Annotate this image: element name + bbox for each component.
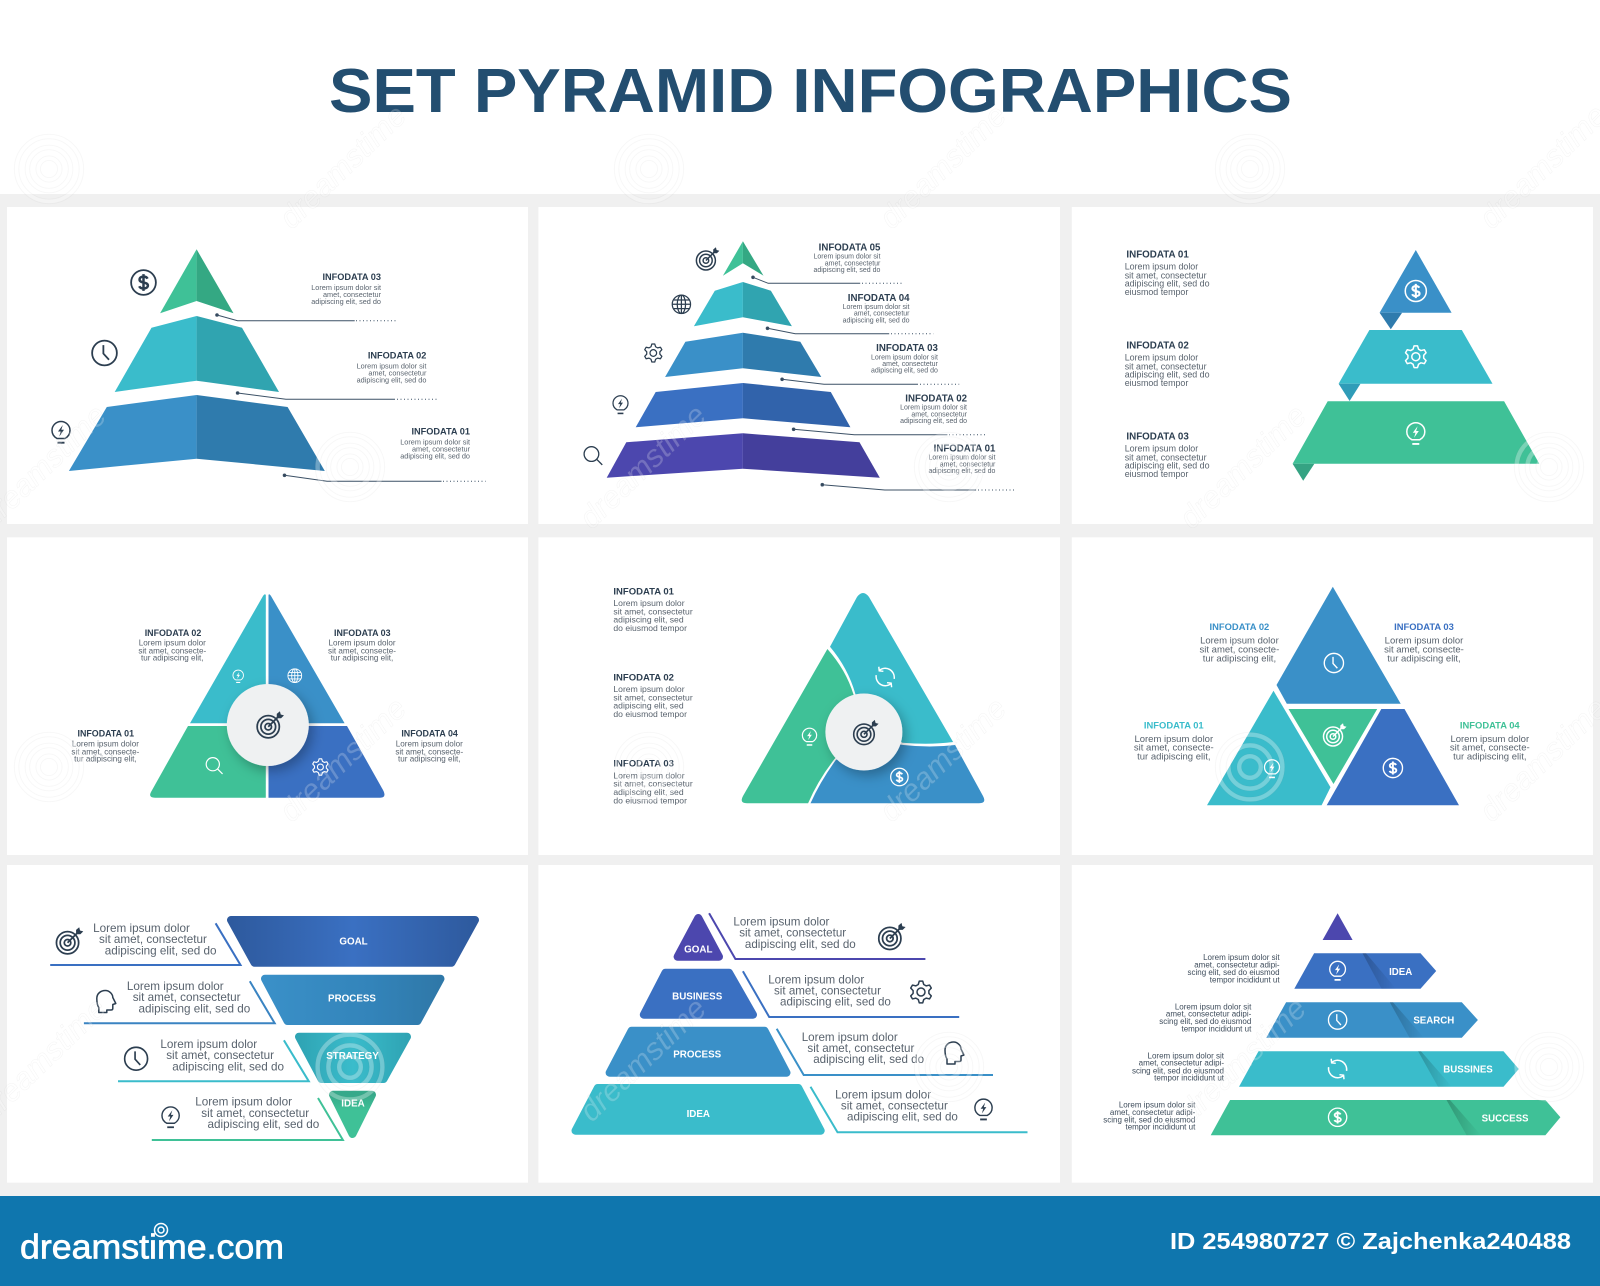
text: infodata 02: tur adipiscing elit, [1203, 653, 1276, 664]
text: infodata 03: Lorem ipsum dolor sit [311, 283, 381, 292]
text: infodata 03: eiusmod tempor [1125, 469, 1188, 479]
text block 4: Lorem ipsum dolor sit [1119, 1101, 1196, 1110]
text: infodata 05: adipiscing elit, sed do [813, 267, 881, 274]
band goal: GOAL [339, 936, 368, 947]
bracket 2 [743, 971, 959, 1017]
text: infodata 03: sit amet, consecte- [328, 646, 396, 655]
watermark overlay: dreamstime [572, 991, 713, 1128]
band process [265, 979, 440, 1021]
text: infodata 01: Lorem ipsum dolor [72, 740, 139, 749]
text: infodata 03: tur adipiscing elit, [1387, 653, 1461, 664]
text block 2: scing elit, sed do eiusmod [1159, 1017, 1251, 1026]
text: infodata 01: Lorem ipsum dolor [1125, 262, 1198, 272]
text: infodata 03: Lorem ipsum dolor sit [871, 354, 938, 361]
icon: target [879, 923, 906, 950]
band strategy: STRATEGY [326, 1051, 379, 1062]
text: infodata 02: INFODATA 02 [1126, 340, 1189, 351]
icon: bulb [613, 396, 628, 413]
text block 3: Lorem ipsum dolor [160, 1038, 257, 1051]
text: infodata 01: amet, consectetur [412, 445, 471, 454]
text: infodata 03: amet, consectetur [882, 361, 939, 368]
text: infodata 04 [1450, 719, 1530, 763]
text block 4: scing elit, sed do eiusmod [1103, 1115, 1195, 1124]
footer bar [0, 1196, 1600, 1286]
text: infodata 01: do eiusmod tempor [613, 623, 687, 633]
text block 1: adipiscing elit, sed do [105, 944, 217, 957]
text: infodata 01: Lorem ipsum dolor sit [400, 438, 470, 447]
text block 1: scing elit, sed do eiusmod [1188, 968, 1280, 977]
text: infodata 01: sit amet, consectetur [613, 606, 693, 616]
segment top left [190, 594, 266, 723]
bracket 3 [118, 1040, 309, 1081]
text block 1: Lorem ipsum dolor [733, 916, 830, 929]
text: infodata 04 [843, 293, 910, 324]
text: infodata 02: amet, consectetur [368, 369, 427, 378]
icon: target [56, 927, 83, 954]
text block 2: amet, consectetur adipi- [1166, 1010, 1252, 1019]
icon: bulb [1264, 760, 1280, 777]
text block 1: Lorem ipsum dolor [93, 922, 190, 935]
panel: quartered triangle with centre circle [7, 537, 528, 855]
leader 3 [781, 378, 959, 384]
text block 4: Lorem ipsum dolor [835, 1088, 931, 1101]
text: infodata 01: amet, consectetur [940, 461, 996, 468]
band success: SUCCESS [1482, 1113, 1529, 1124]
icon: refresh [1329, 1059, 1347, 1079]
leader 3 [216, 314, 396, 321]
text: infodata 05 [813, 243, 881, 274]
text: infodata 02 [613, 673, 693, 719]
text: infodata 03: INFODATA 03 [876, 343, 939, 354]
text: infodata 03: INFODATA 03 [613, 759, 674, 770]
icon: dollar [1405, 280, 1426, 302]
text: infodata 01 [1125, 249, 1210, 297]
panel: triangle with curved segments [538, 537, 1060, 855]
text: infodata 02: sit amet, consectetur [1125, 361, 1207, 371]
text block 2: adipiscing elit, sed do [138, 1002, 251, 1015]
leader 1 [283, 474, 486, 481]
text block 4: adipiscing elit, sed do [208, 1118, 320, 1131]
text: infodata 02: Lorem ipsum dolor [139, 638, 206, 647]
text: infodata 01: INFODATA 01 [78, 729, 134, 739]
text: infodata 02: Lorem ipsum dolor sit [900, 405, 967, 412]
text: infodata 03: Lorem ipsum dolor [328, 638, 396, 647]
text: infodata 01: tur adipiscing elit, [1137, 752, 1211, 763]
segment bottom right [268, 726, 384, 798]
band idea [333, 1095, 372, 1134]
text: infodata 04: sit amet, consecte- [395, 747, 464, 756]
panel: inverted funnel pyramid [7, 865, 528, 1183]
text: infodata 03: Lorem ipsum dolor [1385, 636, 1463, 647]
centre circle [227, 684, 309, 766]
text: infodata 01: Lorem ipsum dolor [1134, 734, 1213, 745]
text: infodata 02: tur adipiscing elit, [141, 654, 204, 663]
text: infodata 03 [1384, 621, 1464, 664]
text block 2: tempor incididunt ut [1181, 1025, 1252, 1034]
text: infodata 04 [395, 729, 464, 764]
panel: pyramid of arrow bands [1072, 865, 1593, 1183]
text: infodata 03: do eiusmod tempor [613, 795, 687, 805]
watermark overlay: dreamstime [272, 98, 413, 235]
text block 3: scing elit, sed do eiusmod [1132, 1066, 1224, 1075]
watermark overlay: dreamstime [872, 98, 1013, 235]
text: infodata 01: eiusmod tempor [1125, 287, 1188, 297]
apex triangle [1323, 913, 1353, 940]
icon: bulb [975, 1099, 992, 1119]
text block 1: amet, consectetur adipi- [1194, 960, 1280, 969]
text: infodata 02: INFODATA 02 [905, 393, 967, 404]
title: SET PYRAMID INFOGRAPHICS [329, 57, 1292, 126]
icon: gear [911, 981, 931, 1003]
text: infodata 02: Lorem ipsum dolor [1200, 636, 1279, 647]
text: infodata 04: sit amet, consecte- [1450, 743, 1530, 754]
text: infodata 03: adipiscing elit, sed do [1125, 461, 1210, 471]
icon: bulb [233, 670, 243, 682]
text: infodata 04: adipiscing elit, sed do [843, 317, 910, 324]
tier process [610, 1031, 786, 1073]
band idea: IDEA [1389, 967, 1412, 978]
text block 4: sit amet, consectetur [201, 1107, 309, 1120]
text: infodata 03: adipiscing elit, sed do [871, 368, 938, 375]
text block 2: Lorem ipsum dolor [127, 980, 224, 993]
band search: SEARCH [1413, 1016, 1454, 1027]
text block 2: sit amet, consectetur [774, 984, 881, 997]
text: infodata 01: adipiscing elit, sed do [1125, 279, 1210, 289]
icon: globe [672, 295, 691, 313]
text: infodata 02: INFODATA 02 [368, 350, 426, 360]
text: infodata 03: Lorem ipsum dolor [1125, 444, 1198, 454]
band search [1266, 1002, 1478, 1038]
text: infodata 03: tur adipiscing elit, [331, 654, 393, 663]
segment top right [268, 594, 345, 723]
band strategy [299, 1037, 407, 1079]
bracket 1 [709, 913, 925, 959]
text: infodata 04: INFODATA 04 [848, 293, 910, 304]
text: infodata 04: Lorem ipsum dolor sit [843, 304, 910, 311]
tier goal: GOAL [684, 945, 712, 956]
band idea: IDEA [341, 1099, 365, 1110]
text block 2: adipiscing elit, sed do [780, 996, 891, 1009]
text block 3: sit amet, consectetur [166, 1049, 274, 1062]
text: infodata 04: INFODATA 04 [1460, 719, 1520, 730]
icon: target [696, 247, 719, 270]
text block 3: adipiscing elit, sed do [813, 1053, 924, 1066]
triangle left teal [1207, 691, 1330, 805]
text: infodata 02: adipiscing elit, sed do [900, 418, 967, 425]
text: infodata 01: sit amet, consecte- [1134, 743, 1214, 754]
text: infodata 03 [311, 272, 382, 306]
icon: head [97, 990, 116, 1012]
text: infodata 03 [871, 343, 939, 375]
bracket 4 [152, 1098, 343, 1140]
text: infodata 01: INFODATA 01 [934, 444, 996, 455]
icon: clock [92, 341, 117, 365]
text: infodata 02 [1200, 621, 1279, 664]
tier business: BUSINESS [672, 991, 723, 1002]
text: infodata 04: INFODATA 04 [401, 729, 458, 739]
tier middle teal [1339, 330, 1492, 401]
icon: gear [645, 344, 662, 362]
text: infodata 03: amet, consectetur [323, 290, 382, 299]
band bussines [1239, 1051, 1519, 1087]
bracket 4 [810, 1087, 1028, 1132]
leader 1 [821, 483, 1015, 490]
icon: bulb [1407, 423, 1425, 444]
tier top blue [1380, 250, 1452, 329]
leader 4 [766, 327, 933, 334]
icon: dollar [1383, 758, 1403, 778]
triangle right royal blue [1327, 709, 1459, 805]
text: infodata 03: sit amet, consectetur [1125, 452, 1207, 462]
triangle centre green [1288, 709, 1377, 784]
text: infodata 01: INFODATA 01 [1144, 719, 1204, 730]
tier 2 teal [115, 316, 279, 392]
text: infodata 02: Lorem ipsum dolor [613, 684, 685, 694]
text block 2: Lorem ipsum dolor [768, 973, 864, 986]
icon: clock [1328, 1011, 1347, 1029]
text: infodata 02: Lorem ipsum dolor [1125, 353, 1198, 363]
text: infodata 05: INFODATA 05 [819, 243, 881, 254]
watermark overlay: dreamstime [272, 691, 413, 828]
icon: bulb [162, 1107, 179, 1127]
text: infodata 01: sit amet, consecte- [71, 747, 140, 756]
text block 1: sit amet, consectetur [99, 933, 207, 946]
text block 4: adipiscing elit, sed do [847, 1110, 958, 1123]
watermark overlay: dreamstime [1172, 991, 1313, 1128]
text block 3: Lorem ipsum dolor [802, 1031, 898, 1044]
footer id and credit: ID 254980727 © Zajchenka240488 [1170, 1228, 1571, 1254]
text: infodata 04: tur adipiscing elit, [398, 755, 461, 764]
footer logo: dreamstime.com [20, 1228, 284, 1266]
text: infodata 01 [71, 729, 140, 764]
segment teal [830, 593, 953, 744]
panel: five tier pyramid with leaders [538, 207, 1060, 524]
panel: triangle made of four triangles [1072, 537, 1593, 855]
text: infodata 03: INFODATA 03 [334, 628, 391, 638]
icon: dollar [1328, 1108, 1347, 1126]
bracket 1 [50, 923, 241, 965]
watermark overlay: dreamstime [572, 398, 713, 535]
tier 5 green [723, 241, 764, 276]
text: infodata 02 [138, 628, 207, 663]
icon: refresh [876, 667, 894, 687]
text block 3: adipiscing elit, sed do [172, 1060, 285, 1073]
text block 1: Lorem ipsum dolor sit [1203, 953, 1280, 962]
text block 2: Lorem ipsum dolor sit [1175, 1002, 1252, 1011]
band goal [231, 920, 475, 963]
text block 4: sit amet, consectetur [841, 1099, 948, 1112]
icon: dollar [891, 768, 908, 786]
text: infodata 02 [357, 350, 427, 385]
text block 3: sit amet, consectetur [807, 1042, 915, 1055]
tier business [644, 973, 753, 1015]
text: infodata 03 [613, 759, 693, 805]
segment bottom left [150, 726, 266, 798]
icon: target [1324, 723, 1346, 746]
text: infodata 01 [928, 444, 996, 475]
icon: target [854, 720, 879, 745]
text block 3: Lorem ipsum dolor sit [1148, 1051, 1225, 1060]
band bussines: BUSSINES [1443, 1065, 1493, 1076]
text block 4: tempor incididunt ut [1125, 1123, 1196, 1132]
icon: gear [1406, 346, 1426, 368]
tier 4 teal [694, 282, 792, 326]
band success [1211, 1100, 1560, 1135]
band process: PROCESS [328, 993, 376, 1004]
panel: stacked pyramid with folded corners [1072, 207, 1593, 524]
text: infodata 04: tur adipiscing elit, [1453, 752, 1527, 763]
panel: segmented pyramid with three tiers and leaders [7, 207, 528, 524]
tier 3 green [160, 249, 234, 313]
text: infodata 05: amet, consectetur [825, 260, 881, 267]
text: infodata 03: INFODATA 03 [322, 272, 381, 282]
icon: bulb [1330, 961, 1345, 980]
icon: globe [288, 669, 302, 683]
text: infodata 02: adipiscing elit, sed [613, 701, 684, 711]
text: infodata 02: eiusmod tempor [1125, 378, 1188, 388]
text: infodata 03: INFODATA 03 [1126, 431, 1189, 442]
text block 3: amet, consectetur adipi- [1139, 1059, 1224, 1068]
text: infodata 01: INFODATA 01 [1126, 249, 1189, 260]
text: infodata 01: Lorem ipsum dolor [613, 598, 685, 608]
tier 1 blue [69, 395, 325, 471]
text block 1: adipiscing elit, sed do [745, 938, 856, 951]
icon: search [206, 758, 223, 774]
text: infodata 03: INFODATA 03 [1394, 621, 1454, 632]
text: infodata 01: INFODATA 01 [613, 586, 675, 597]
icon: clock [125, 1047, 148, 1070]
text: infodata 03: Lorem ipsum dolor [613, 770, 685, 780]
text: infodata 02: amet, consectetur [911, 411, 968, 418]
watermark overlay: dreamstime [872, 691, 1013, 828]
watermark overlay: dreamstime [1172, 398, 1313, 535]
tier 3 blue [665, 333, 821, 377]
text: infodata 03: sit amet, consecte- [1384, 645, 1464, 656]
leader 2 [792, 428, 986, 435]
text: infodata 04: Lorem ipsum dolor [1450, 734, 1529, 745]
text: infodata 01 [1134, 719, 1214, 763]
text: infodata 02: adipiscing elit, sed do [357, 376, 426, 385]
text: infodata 02 [900, 393, 968, 425]
icon: bulb [802, 728, 817, 745]
text: infodata 01 [613, 586, 693, 633]
icon: target [257, 711, 284, 738]
text: infodata 03 [1125, 431, 1210, 479]
text: infodata 01 [400, 426, 471, 461]
icon: bulb [52, 422, 70, 443]
segment blue [810, 740, 984, 803]
icon: head [945, 1042, 964, 1064]
text: infodata 03: adipiscing elit, sed [613, 787, 684, 797]
text: infodata 04: Lorem ipsum dolor [396, 740, 463, 749]
tier idea [576, 1088, 821, 1131]
text block 2: sit amet, consectetur [133, 991, 241, 1004]
bracket 3 [777, 1029, 993, 1075]
icon: clock [1324, 653, 1344, 673]
text: infodata 01: INFODATA 01 [411, 426, 470, 436]
tier process: PROCESS [673, 1049, 722, 1060]
text block 4: amet, consectetur adipi- [1110, 1108, 1196, 1117]
text: infodata 04: amet, consectetur [854, 311, 910, 318]
tier bottom green [1293, 401, 1539, 481]
bracket 2 [84, 981, 275, 1023]
text: infodata 05: Lorem ipsum dolor sit [813, 254, 880, 261]
text: infodata 03: adipiscing elit, sed do [311, 297, 381, 306]
leader 5 [752, 276, 903, 283]
tier goal [678, 918, 719, 957]
text: infodata 01: adipiscing elit, sed [613, 615, 684, 625]
segment green [742, 649, 870, 803]
text: infodata 01: sit amet, consectetur [1125, 270, 1207, 280]
tier 1 indigo [607, 433, 880, 478]
text block 1: tempor incididunt ut [1210, 975, 1280, 984]
text: infodata 02: adipiscing elit, sed do [1125, 370, 1210, 380]
triangle top blue [1276, 587, 1401, 704]
text: infodata 01: adipiscing elit, sed do [928, 468, 996, 475]
tier idea: IDEA [687, 1109, 710, 1120]
icon: search [584, 447, 602, 465]
panel: rounded pyramid with right side text [538, 865, 1060, 1183]
text block 4: Lorem ipsum dolor [195, 1096, 292, 1109]
text block 1: sit amet, consectetur [739, 927, 846, 940]
text: infodata 02: do eiusmod tempor [613, 709, 687, 719]
leader 2 [236, 392, 439, 399]
text: infodata 02: INFODATA 02 [145, 628, 201, 638]
text: infodata 02: Lorem ipsum dolor sit [357, 362, 426, 371]
icon: gear [313, 759, 328, 775]
icon: dollar [131, 270, 156, 295]
text: infodata 01: tur adipiscing elit, [74, 755, 137, 764]
text: infodata 02: INFODATA 02 [613, 673, 674, 684]
text: infodata 03: sit amet, consectetur [613, 779, 693, 789]
centre circle [825, 694, 902, 770]
text block 3: tempor incididunt ut [1154, 1074, 1225, 1083]
band idea [1294, 953, 1436, 989]
text: infodata 01: Lorem ipsum dolor sit [928, 455, 995, 462]
text: infodata 02: sit amet, consecte- [1200, 645, 1279, 656]
text: infodata 03 [328, 628, 396, 663]
text: infodata 02 [1125, 340, 1210, 388]
text: infodata 02: sit amet, consecte- [138, 646, 207, 655]
text: infodata 02: sit amet, consectetur [613, 692, 693, 702]
text: infodata 02: INFODATA 02 [1210, 621, 1269, 632]
text: infodata 01: adipiscing elit, sed do [400, 452, 470, 461]
tier 2 royal blue [636, 383, 850, 427]
